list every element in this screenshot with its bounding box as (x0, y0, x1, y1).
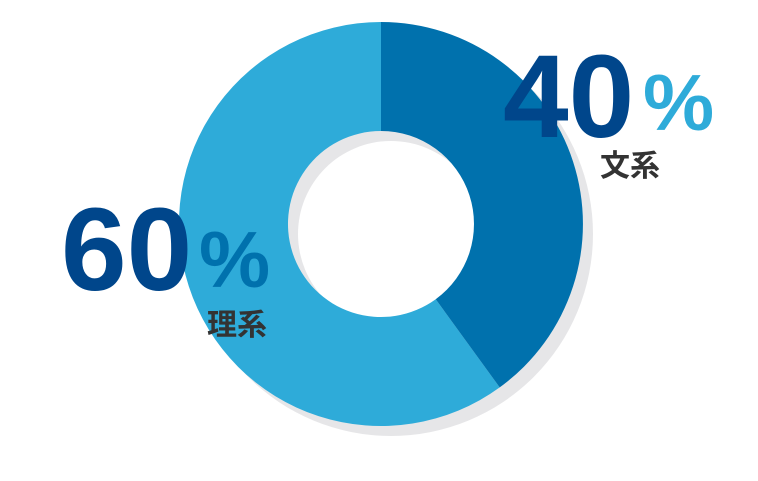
number 60: 60 (61, 184, 192, 316)
percent sign: % (643, 58, 714, 147)
label: 60% 理系 (61, 184, 270, 342)
shadow (189, 32, 593, 436)
text 理系: 理系 (207, 309, 267, 342)
number 40: 40 (503, 31, 634, 163)
text 文系: 文系 (600, 150, 660, 183)
slice: 40% 文系 (381, 22, 583, 387)
percent sign: % (199, 215, 270, 304)
slice: 60% 理系 (179, 22, 500, 426)
label: 40% 文系 (503, 31, 714, 183)
